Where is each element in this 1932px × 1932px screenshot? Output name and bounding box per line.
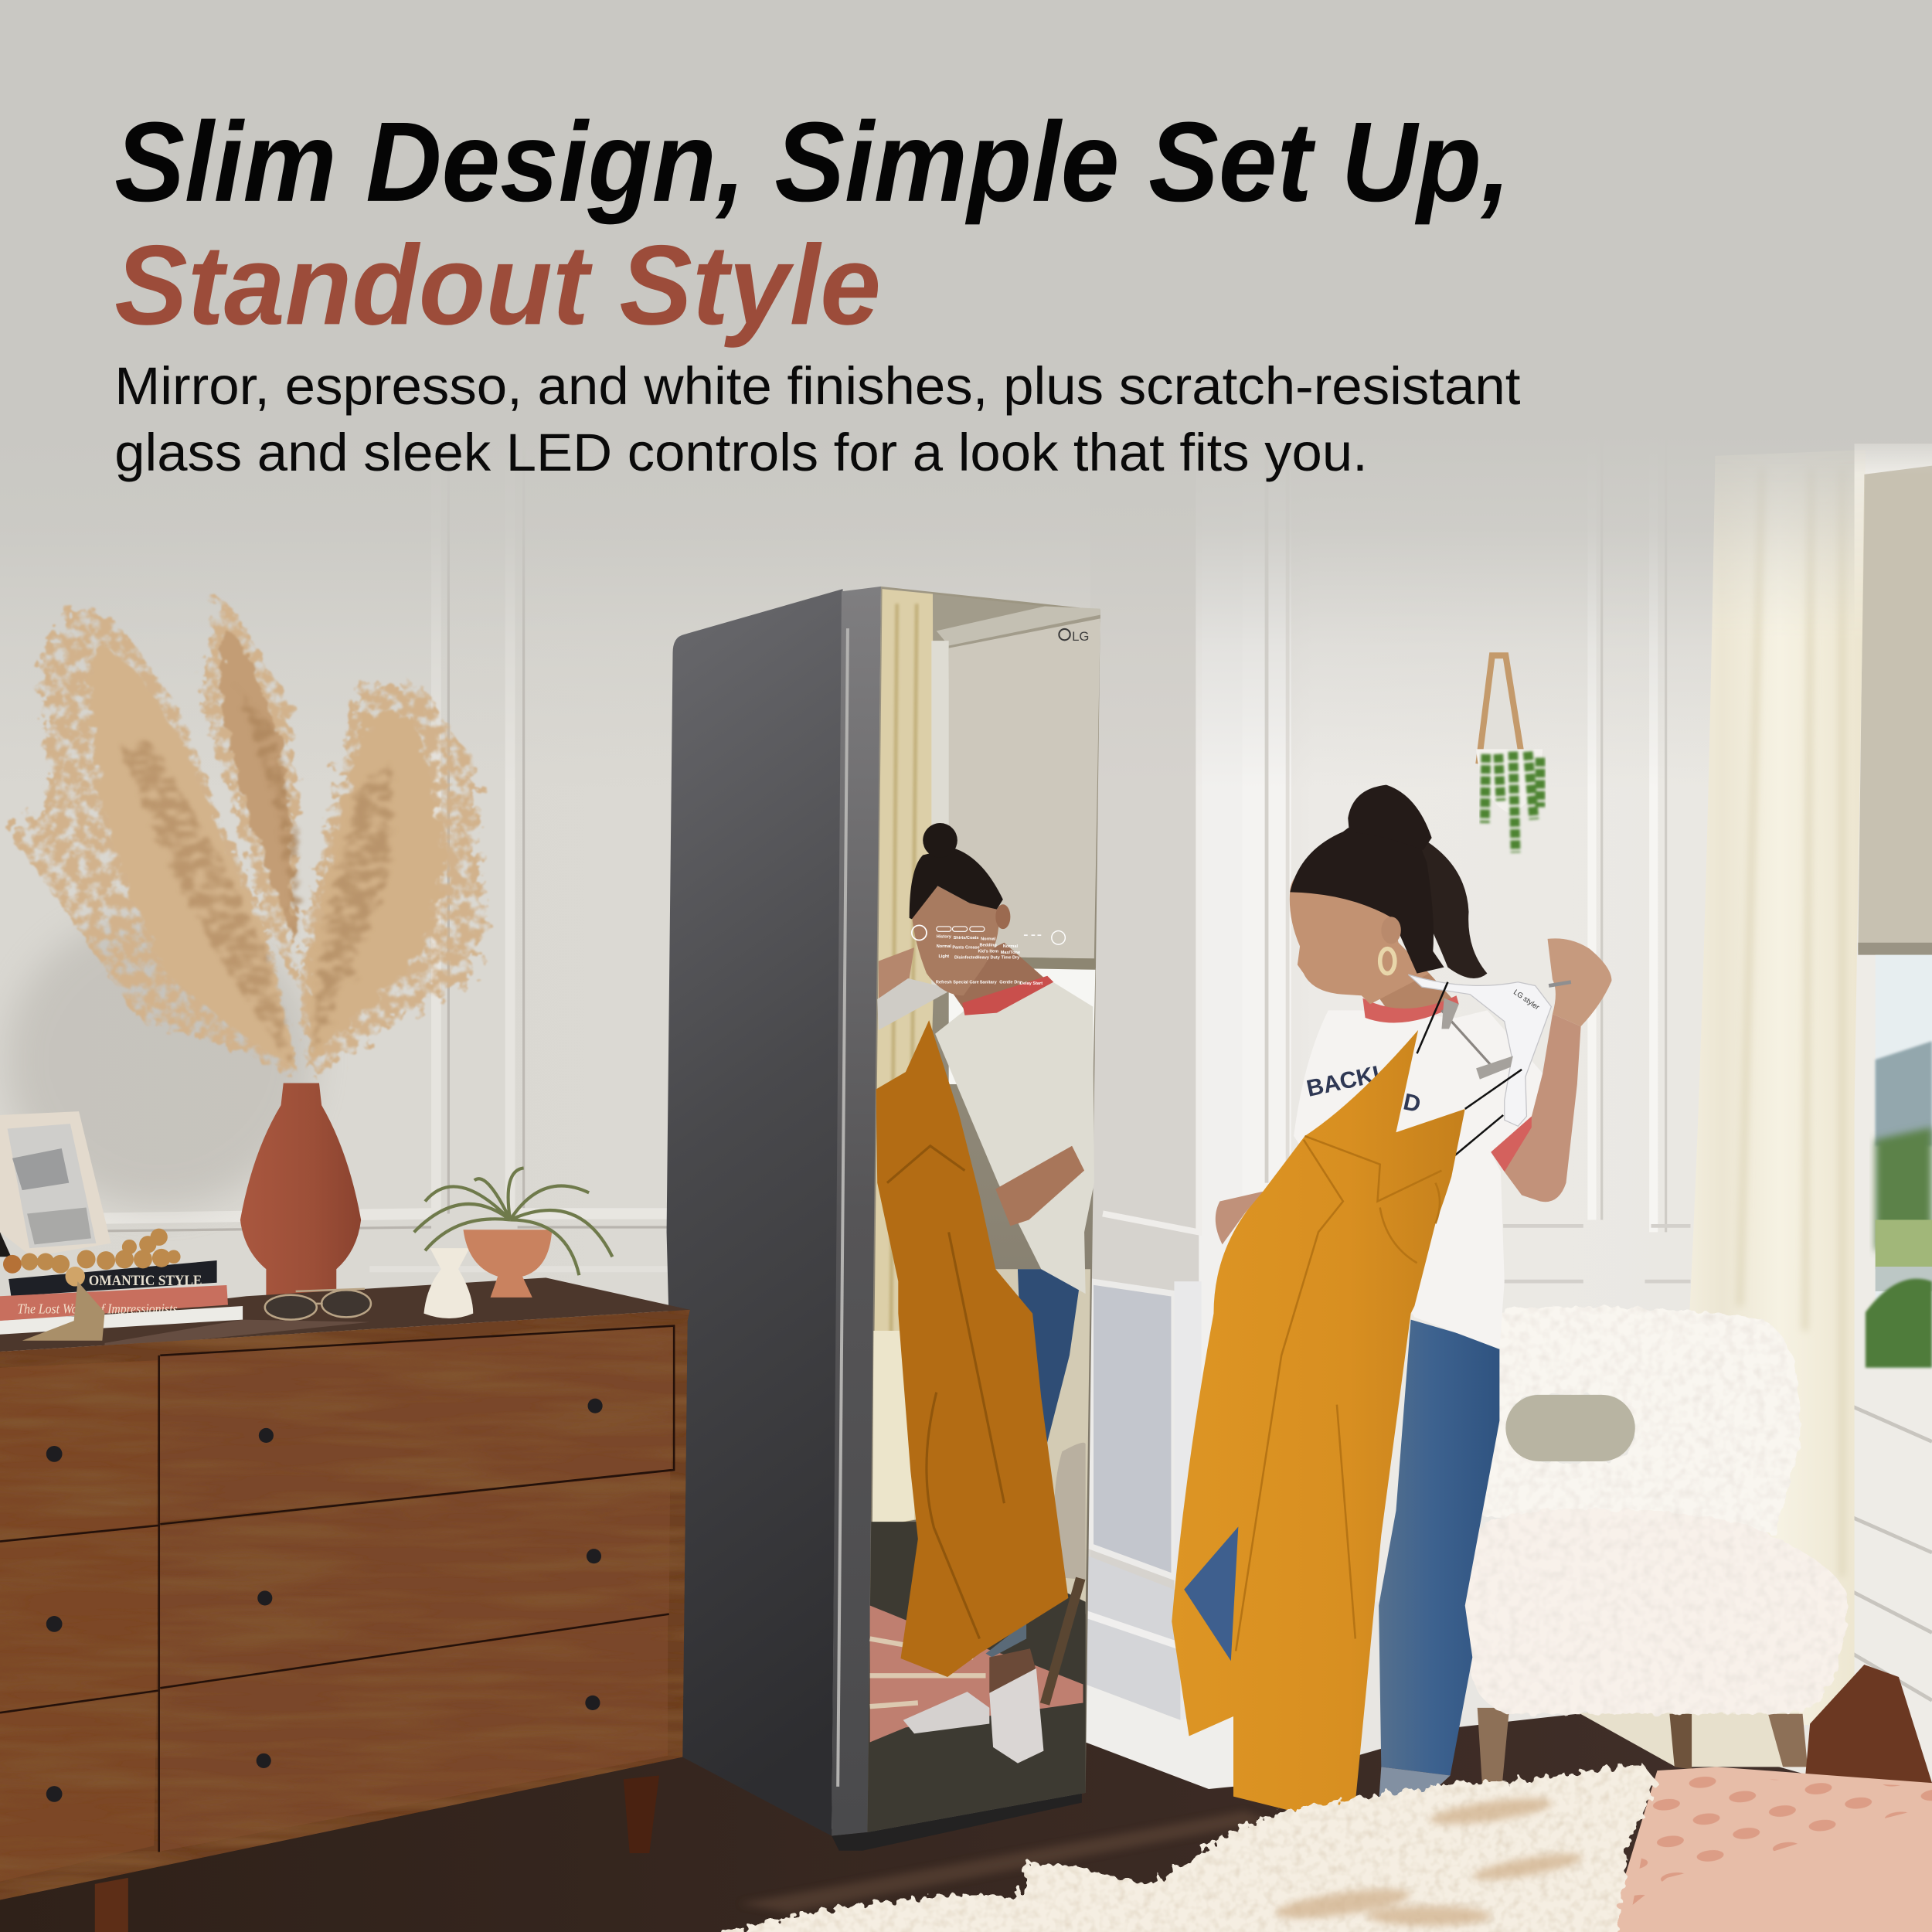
reflected stool bbox=[1053, 1443, 1086, 1580]
hanger: LG styler bbox=[1512, 988, 1541, 1012]
reflected face bbox=[912, 886, 998, 995]
reflected arm and hand bbox=[995, 1146, 1084, 1226]
white shag rug bbox=[690, 1764, 1657, 1932]
title line 1: Slim Design, Simple Set Up, bbox=[114, 99, 1511, 226]
drawer gaps bbox=[0, 1326, 674, 1852]
chair legs bbox=[1478, 1708, 1509, 1787]
reflected window shade bbox=[947, 618, 1100, 958]
reflected neck bbox=[939, 943, 1047, 1010]
LED control panel: Disinfected bbox=[954, 955, 978, 960]
wooden beads bbox=[3, 1229, 181, 1287]
window bbox=[1855, 444, 1932, 1702]
jeans bbox=[1379, 1320, 1499, 1776]
curtain bbox=[1697, 465, 1865, 1725]
LED control panel: Pants Crease bbox=[952, 946, 980, 951]
reflected collar bbox=[962, 976, 1053, 1015]
LED control panel: Light bbox=[938, 954, 949, 959]
window shade bbox=[1858, 466, 1932, 951]
left column drawers bbox=[0, 1360, 158, 1882]
stack of books and beads: OMANTIC STYLE bbox=[89, 1273, 202, 1289]
dress bbox=[1172, 1030, 1465, 1815]
reflected roller bar bbox=[937, 606, 1100, 645]
door edge highlight bbox=[838, 628, 848, 1787]
LED control panel: Heavy Duty bbox=[977, 955, 1001, 960]
jeans cuff bbox=[1379, 1767, 1451, 1803]
arm bbox=[1505, 1014, 1581, 1202]
mirror background bbox=[867, 587, 1100, 1832]
reflected ceiling bbox=[930, 594, 1100, 651]
LED control panel: Normal bbox=[937, 944, 951, 949]
handbag bbox=[1805, 1665, 1932, 1783]
LED control panel: Bedding bbox=[980, 943, 997, 947]
LED control panel: Max/Tone bbox=[1001, 951, 1020, 955]
planter strap bbox=[1478, 655, 1523, 764]
LED control panel: Delay Start bbox=[1020, 981, 1043, 986]
LED control panel: Normal bbox=[981, 937, 996, 942]
LED control panel: Normal bbox=[1003, 944, 1018, 949]
hair bbox=[1290, 827, 1444, 974]
LG logo bbox=[1059, 629, 1089, 644]
shirt collar bbox=[1362, 995, 1459, 1023]
reflected rug bbox=[870, 1605, 1083, 1742]
pampas grass bbox=[6, 595, 487, 1078]
LED control panel: Sanitary bbox=[980, 980, 998, 985]
reflected socks bbox=[989, 1668, 1043, 1764]
bead tassel bbox=[22, 1281, 105, 1341]
reflected jeans bbox=[1018, 1269, 1082, 1466]
pampas darker shading bbox=[117, 690, 392, 1070]
neck bbox=[1370, 961, 1454, 1016]
picture frame bbox=[0, 1111, 111, 1257]
title line 2: Standout Style bbox=[114, 222, 881, 349]
woman: D bbox=[1401, 1090, 1423, 1117]
LED control panel: Kid's Item bbox=[978, 949, 998, 954]
ponytail bun bbox=[1348, 785, 1432, 850]
woman bbox=[1172, 785, 1611, 1815]
dress seams bbox=[1236, 1136, 1441, 1651]
reflected dress bbox=[876, 1020, 1068, 1677]
dresser legs bbox=[624, 1776, 659, 1853]
stack of books and beads bbox=[0, 1229, 243, 1341]
trailing leaves bbox=[1485, 752, 1540, 852]
wall panels between styler and window bbox=[1086, 369, 1691, 1789]
blanket tufted dots bbox=[1633, 1774, 1932, 1905]
LED control panel: Gentle Dry bbox=[999, 980, 1022, 985]
window frame bbox=[1855, 444, 1932, 573]
chair seat bbox=[1464, 1509, 1847, 1714]
reflected bright window bbox=[949, 968, 1095, 1084]
floor bbox=[0, 1713, 1932, 1932]
dresser bbox=[0, 1277, 690, 1932]
hanger bbox=[1408, 975, 1571, 1165]
reflected ankle bbox=[989, 1648, 1036, 1693]
boucle armchair bbox=[1464, 1307, 1847, 1787]
LED control panel bbox=[912, 925, 1065, 986]
chair back with oval cut-out bbox=[1475, 1307, 1801, 1534]
LED control panel: Refresh bbox=[936, 980, 952, 985]
cabinet side panel bbox=[667, 589, 843, 1836]
floor sheen bbox=[740, 1811, 1269, 1912]
reflected hanger bbox=[877, 978, 952, 1030]
top fade into plain title background bbox=[0, 0, 1932, 788]
hand bbox=[1548, 938, 1611, 1026]
pampas outer wisps bbox=[6, 595, 487, 1078]
hand holding the dress bbox=[1216, 1192, 1263, 1244]
description text bbox=[114, 356, 1520, 482]
tabletop reflection bbox=[105, 1320, 369, 1349]
description text: Mirror, espresso, and white finishes, plus scratch-resistant bbox=[114, 356, 1520, 416]
terracotta vase bbox=[240, 1083, 361, 1300]
hanging wall planter bbox=[1476, 655, 1543, 852]
wall mouldings left bbox=[0, 369, 668, 1269]
cabinet hinge column bbox=[832, 587, 881, 1836]
t-shirt bbox=[1294, 1010, 1543, 1349]
rug woven tan patches bbox=[1274, 1793, 1584, 1926]
description text: glass and sleek LED controls for a look that fits you. bbox=[114, 423, 1368, 482]
cabinet base bbox=[832, 1793, 1082, 1851]
curtain pooling on floor bbox=[1578, 1713, 1808, 1767]
reflected t-shirt bbox=[935, 981, 1094, 1294]
title bbox=[114, 99, 1511, 349]
LG Styler cabinet bbox=[667, 587, 1100, 1851]
pampas plume bodies bbox=[89, 628, 446, 1070]
reflected hair and bun bbox=[910, 848, 1003, 919]
shirt lettering: BACKL bbox=[1304, 1060, 1389, 1102]
sleeve trim bbox=[1491, 1117, 1532, 1172]
LED control panel: Shirts/Coats bbox=[954, 936, 978, 940]
face bbox=[1290, 862, 1429, 1004]
window glass view bbox=[1875, 955, 1932, 1297]
leg through dress slit bbox=[1184, 1526, 1238, 1661]
LG logo: LG bbox=[1072, 629, 1089, 644]
LED control panel: History bbox=[937, 934, 952, 939]
reflected floor bbox=[867, 1522, 1086, 1832]
pink blanket bbox=[1608, 1767, 1932, 1932]
soft shadow of pampas on wall bbox=[6, 912, 315, 1207]
ear and earring bbox=[1381, 917, 1401, 944]
dresser body bbox=[0, 1310, 690, 1900]
mirror door bbox=[867, 587, 1100, 1832]
sunglasses bbox=[265, 1289, 371, 1320]
stack of books and beads: The Lost World of Impressionists bbox=[17, 1301, 178, 1317]
reflected curtain bbox=[872, 589, 934, 1528]
LED control panel: Time Dry bbox=[1002, 955, 1020, 960]
braid bbox=[1417, 835, 1487, 978]
reflected wall lower bbox=[918, 1269, 1090, 1614]
window sill lines bbox=[1849, 1405, 1932, 1700]
LED control panel: Special Care bbox=[953, 980, 979, 985]
dresser top bbox=[0, 1277, 690, 1352]
small white vase bbox=[423, 1248, 473, 1318]
right column drawers bbox=[158, 1327, 674, 1852]
drawer knobs bbox=[46, 1399, 603, 1802]
potted air plant bbox=[414, 1168, 612, 1298]
